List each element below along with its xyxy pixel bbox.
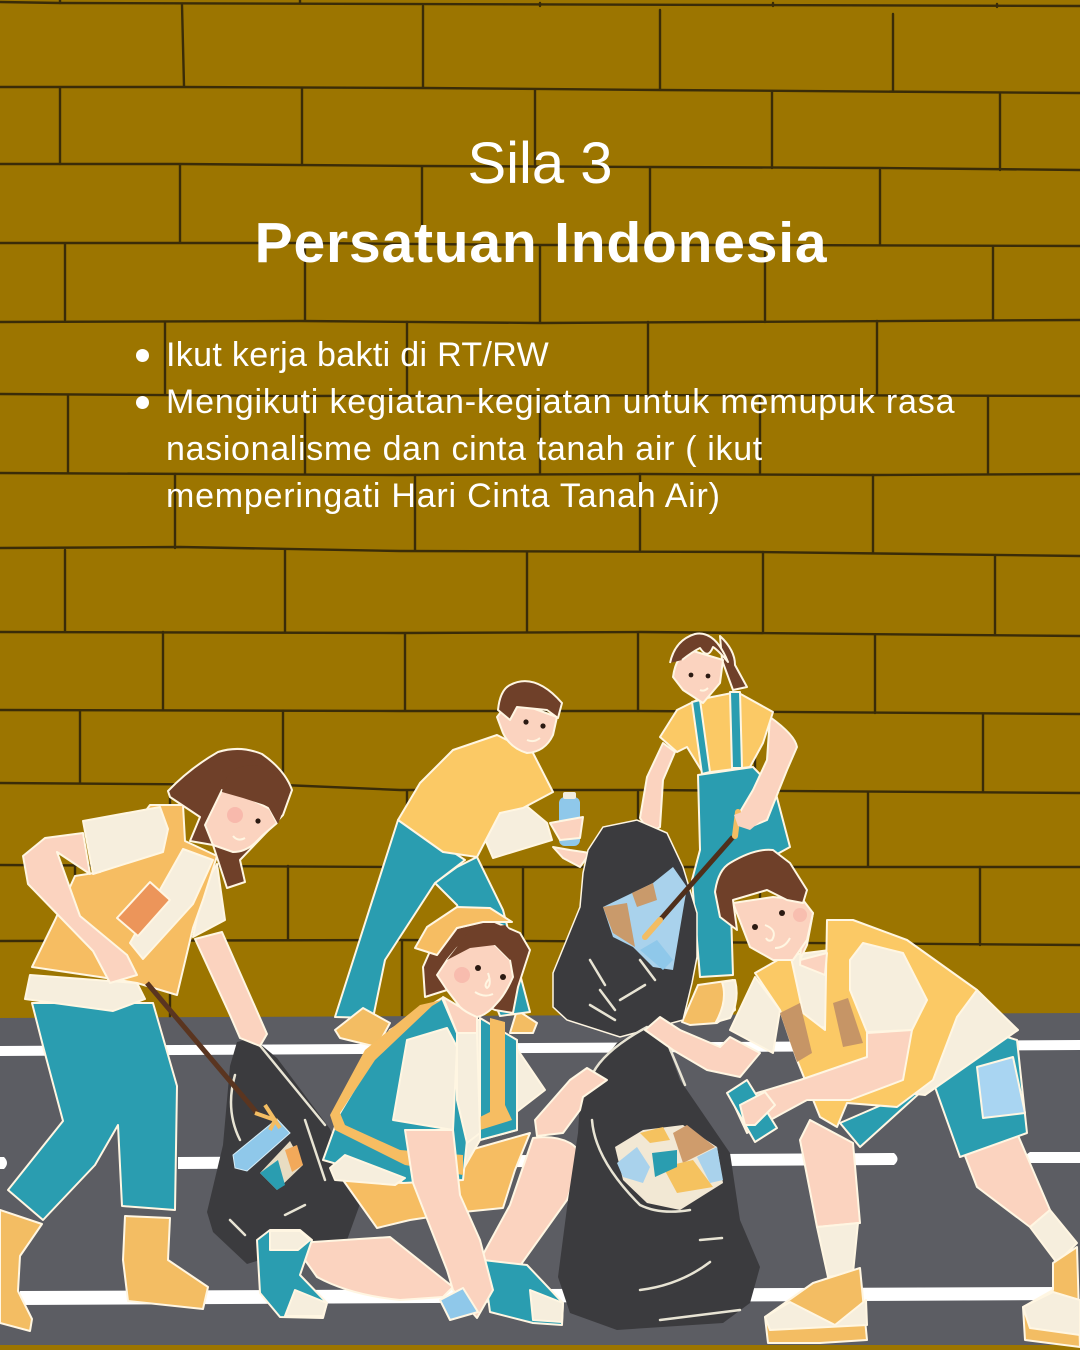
bullet 2: memperingati Hari Cinta Tanah Air) — [166, 477, 721, 515]
picker stick: left, with bottle — [147, 983, 290, 1171]
picker stick with grabber — [645, 808, 762, 937]
figure: boy in vest on the right — [645, 850, 1080, 1347]
rubbish bag: left — [207, 1038, 360, 1264]
rubbish bag: front — [558, 1027, 760, 1330]
bullet 2: nasionalisme dan cinta tanah air ( ikut — [166, 430, 763, 468]
rubbish bag: back — [553, 820, 697, 1037]
heading: Persatuan Indonesia: Persatuan Indonesia — [255, 211, 827, 275]
figure: boy with bottle at the back — [335, 681, 590, 1047]
heading: Sila 3: Sila 3 — [467, 131, 613, 196]
bullet list — [136, 336, 955, 515]
bullet 2: Mengikuti kegiatan-kegiatan untuk memupuk rasa — [166, 383, 955, 421]
figure: girl sitting in the middle — [257, 907, 580, 1325]
road — [0, 1013, 1080, 1345]
figure: girl in overalls at the back — [640, 634, 797, 1025]
bullet 2 — [136, 383, 955, 515]
forearm and hand of the sitting girl — [535, 1068, 607, 1136]
bullet 1: Ikut kerja bakti di RT/RW — [166, 336, 549, 374]
figure: girl with vest on the left — [0, 749, 292, 1331]
